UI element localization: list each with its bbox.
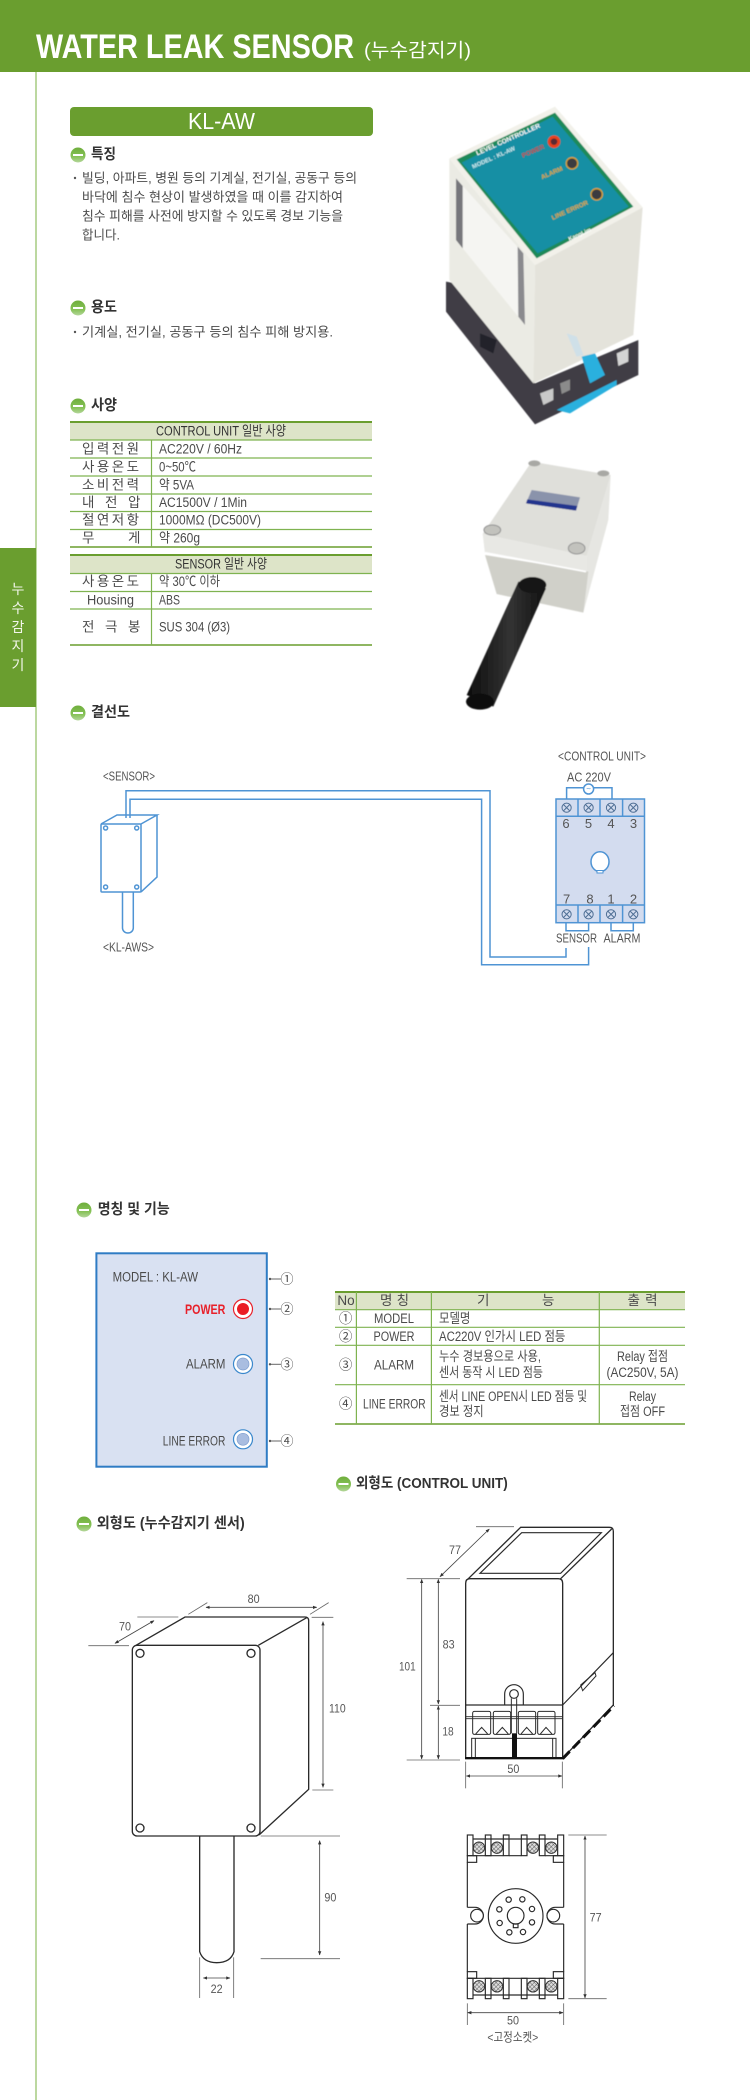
section: outline control unit heading <box>336 1475 508 1492</box>
sensor output label: SENSOR <box>556 930 597 946</box>
heading: names and functions: 명칭 및 기능 <box>98 1201 170 1218</box>
icon: bullet <box>70 148 86 162</box>
dimension 77: 77 <box>449 1543 461 1557</box>
AC supply symbol <box>567 784 612 799</box>
table: names and functions: 누수 경보용으로 사용, <box>439 1349 541 1364</box>
control unit terminal block: 2 <box>630 892 637 906</box>
dimension 70 <box>88 1617 178 1646</box>
callout numbers: ③ <box>280 1357 294 1372</box>
table: sensor specs: 봉 <box>128 620 140 634</box>
side label <box>456 178 525 325</box>
section: names and functions heading <box>76 1201 170 1218</box>
dimension 90 <box>261 1836 340 1959</box>
dimension 50: 50 <box>507 2014 519 2028</box>
table: sensor specs: 사 용 온 도 <box>82 574 139 589</box>
table: sensor specs: 약 30℃ 이하 <box>159 574 220 589</box>
dimension 50 <box>466 1762 562 1788</box>
power indicator <box>185 1300 252 1318</box>
dimension 83: 83 <box>443 1638 455 1652</box>
AC supply label: AC 220V <box>567 770 611 784</box>
dimension 110: 110 <box>329 1701 346 1715</box>
socket center contacts <box>488 1889 543 1943</box>
table: control unit specs: 1000MΩ (DC500V) <box>159 512 261 528</box>
table: control unit specs: 약 260g <box>159 530 200 546</box>
LEDs <box>548 135 560 148</box>
table: control unit specs: 내 <box>82 495 94 510</box>
table: control unit specs: 소 비 전 력 <box>82 478 139 492</box>
table: control unit specs: 무 <box>82 530 94 546</box>
heading: specs: 사양 <box>91 397 117 414</box>
heading: usage: 용도 <box>91 299 117 316</box>
output brackets <box>566 923 633 931</box>
table: names and functions: (AC250V, 5A) <box>606 1365 678 1380</box>
table: control unit specs: 전 <box>105 495 117 510</box>
section: features <box>70 146 357 242</box>
base socket <box>446 282 638 424</box>
teal panel <box>462 117 629 253</box>
table: sensor specs: SENSOR 일반 사양 <box>175 556 267 572</box>
side tab: category: 누 <box>12 581 25 597</box>
table: names and functions: 모델명 <box>439 1311 470 1326</box>
features text <box>74 170 357 242</box>
section: usage <box>70 299 333 340</box>
photo: control unit: LINE ERROR <box>551 199 590 222</box>
heading: features: 특징 <box>91 146 116 163</box>
features text: 침수 피해를 사전에 방지할 수 있도록 경보 기능을 <box>82 208 343 224</box>
table: names and functions: 기 <box>477 1293 489 1308</box>
wires <box>126 791 589 965</box>
alarm indicator: ALARM <box>186 1356 225 1372</box>
housing right side <box>533 207 643 383</box>
callout numbers: ① <box>280 1272 294 1286</box>
table: control unit specs: 압 <box>128 495 140 510</box>
table: sensor specs: Housing <box>87 592 134 608</box>
table: names and functions: ALARM <box>374 1358 414 1372</box>
front panel diagram <box>96 1253 294 1467</box>
icon: bullet <box>76 1516 92 1532</box>
side tab: category <box>0 548 36 707</box>
control unit terminal block: 6 <box>562 816 570 831</box>
photo: control unit: KangLim <box>568 227 592 243</box>
table: names and functions: Relay <box>629 1389 656 1404</box>
name plate <box>526 490 580 511</box>
table: names and functions: LINE ERROR <box>363 1396 426 1412</box>
dimension 50 <box>467 2003 564 2028</box>
table: sensor specs: ABS <box>159 592 180 608</box>
section: outline sensor heading <box>76 1515 245 1532</box>
housing outline <box>466 1527 613 1758</box>
icon: bullet <box>76 1202 92 1218</box>
table: control unit specs: 약 5VA <box>159 478 194 492</box>
table: names and functions: ④ <box>339 1396 353 1412</box>
table: names and functions: ③ <box>339 1358 353 1372</box>
green face <box>457 113 633 258</box>
sensor box drawing <box>101 815 157 933</box>
table: names and functions: POWER <box>374 1329 415 1344</box>
dimension 22: 22 <box>211 1982 223 1996</box>
dimension 101: 101 <box>399 1660 416 1674</box>
callout numbers <box>269 1272 294 1448</box>
side tab: category: 지 <box>12 638 24 654</box>
table: control unit specs: 게 <box>128 530 140 546</box>
side tab: category: 수 <box>12 600 25 616</box>
title korean subtitle: (누수감지기) <box>364 40 471 62</box>
model name bar: KL-AW <box>188 108 255 134</box>
socket caption: <고정소켓> <box>487 2031 538 2045</box>
dimension 50: 50 <box>507 1762 519 1776</box>
section: wiring diagram heading <box>70 704 130 721</box>
table: names and functions: 센서 동작 시 LED 점등 <box>439 1365 543 1380</box>
dimension 80: 80 <box>248 1592 260 1606</box>
sidebar guide line <box>35 72 37 2100</box>
photo: sensor <box>466 460 611 710</box>
features text: 합니다. <box>82 228 120 242</box>
table: control unit specs <box>70 422 372 547</box>
table: names and functions: AC220V 인가시 LED 점등 <box>439 1329 565 1344</box>
table: names and functions: 경보 정지 <box>439 1404 484 1419</box>
bezel <box>449 107 643 265</box>
table: names and functions: 접점 OFF <box>620 1404 665 1419</box>
table: names and functions: No <box>337 1293 355 1308</box>
sensor label: <SENSOR> <box>103 768 155 784</box>
socket front <box>465 1685 614 1759</box>
table: names and functions: ① <box>339 1311 353 1326</box>
side tab: category: 기 <box>12 657 24 673</box>
table: sensor specs: SUS 304 (Ø3) <box>159 620 230 634</box>
table: sensor specs: 전 <box>82 620 94 634</box>
table: names and functions: 센서 LINE OPEN시 LED 점등 및 <box>439 1389 587 1404</box>
callout numbers: ④ <box>280 1434 294 1448</box>
socket dimension drawing <box>467 1835 607 2045</box>
sensor model label: <KL-AWS> <box>103 940 154 954</box>
dimension 70: 70 <box>119 1620 131 1634</box>
control unit terminal block <box>556 799 644 923</box>
table: names and functions: 명 칭 <box>380 1293 409 1308</box>
table: control unit specs: 0~50℃ <box>159 460 196 474</box>
dimension 80 <box>188 1592 329 1614</box>
dimension 22 <box>200 1957 234 1998</box>
line error indicator: LINE ERROR <box>163 1434 226 1448</box>
photo: control unit: POWER <box>521 143 546 160</box>
table: names and functions: MODEL <box>374 1311 414 1326</box>
blue clip <box>557 380 617 413</box>
control unit terminal block: 4 <box>607 816 615 831</box>
AC supply symbol: ~ <box>586 784 591 794</box>
control unit label: <CONTROL UNIT> <box>558 748 646 764</box>
title banner <box>0 0 750 72</box>
wiring diagram <box>101 748 646 965</box>
control unit dimension drawing <box>399 1527 614 1788</box>
black rod <box>467 582 546 707</box>
control unit terminal block: 8 <box>586 892 594 906</box>
icon: bullet <box>70 398 86 414</box>
screws <box>528 460 540 466</box>
heading: outline sensor: 외형도 (누수감지기 센서) <box>97 1515 245 1532</box>
photo: control unit: ALARM <box>540 165 564 181</box>
table: control unit specs: CONTROL UNIT 일반 사양 <box>156 424 286 438</box>
heading: wiring: 결선도 <box>91 704 130 721</box>
sensor lid <box>483 462 611 556</box>
control unit terminal block: 1 <box>607 892 615 906</box>
usage text: 기계실, 전기실, 공동구 등의 침수 피해 방지용. <box>82 324 333 340</box>
model name bar <box>70 107 373 136</box>
alarm indicator <box>186 1354 252 1374</box>
dimension 83 <box>438 1579 455 1704</box>
title: WATER LEAK SENSOR <box>36 28 354 66</box>
model text: MODEL : KL-AW <box>113 1270 198 1284</box>
table: control unit specs: 절 연 저 항 <box>82 512 139 528</box>
sensor outline <box>132 1617 309 1963</box>
table: names and functions: 출 력 <box>628 1293 658 1308</box>
control unit terminal block: 5 <box>585 816 592 831</box>
heading: outline control unit: 외형도 (CONTROL UNIT) <box>356 1475 508 1492</box>
icon: bullet <box>336 1476 351 1492</box>
table: names and functions: 능 <box>542 1293 554 1308</box>
icon: bullet <box>70 300 86 316</box>
table: names and functions: ② <box>339 1329 353 1344</box>
panel texts: LEVEL CONTROLLER <box>475 123 542 157</box>
table: names and functions: Relay 접점 <box>617 1349 668 1364</box>
section: specs <box>70 397 117 414</box>
alarm output label: ALARM <box>604 930 640 946</box>
side tab: category: 감 <box>12 619 25 635</box>
table: names and functions <box>335 1292 685 1424</box>
socket screws <box>473 1842 557 1992</box>
features text: 빌딩, 아파트, 병원 등의 기계실, 전기실, 공동구 등의 <box>82 170 357 186</box>
power indicator: POWER <box>185 1301 225 1317</box>
control unit terminal block: 7 <box>563 892 570 906</box>
icon: bullet <box>70 706 86 720</box>
dimension 90: 90 <box>324 1891 336 1905</box>
dimension 77 <box>440 1527 514 1577</box>
dimension 18 <box>430 1705 460 1759</box>
photo: control unit: MODEL : KL-AW <box>472 146 517 171</box>
socket outline <box>467 1835 564 1999</box>
dimension 77: 77 <box>590 1911 602 1925</box>
features text: 바닥에 침수 현상이 발생하였을 때 이를 감지하여 <box>82 190 343 204</box>
table: control unit specs: AC220V / 60Hz <box>159 442 242 456</box>
callout numbers: ② <box>280 1302 294 1316</box>
table: control unit specs: 사 용 온 도 <box>82 460 139 474</box>
photo: control unit <box>446 107 643 424</box>
table: sensor specs <box>70 555 372 645</box>
control unit terminal block: 3 <box>630 816 637 831</box>
table: control unit specs: AC1500V / 1Min <box>159 495 247 510</box>
table: sensor specs: 극 <box>105 620 117 634</box>
sensor body <box>583 475 611 613</box>
dimension 18: 18 <box>442 1724 454 1738</box>
housing left side <box>449 158 535 383</box>
sensor dimension drawing <box>88 1592 346 1998</box>
table: control unit specs: 입 력 전 원 <box>82 442 139 456</box>
